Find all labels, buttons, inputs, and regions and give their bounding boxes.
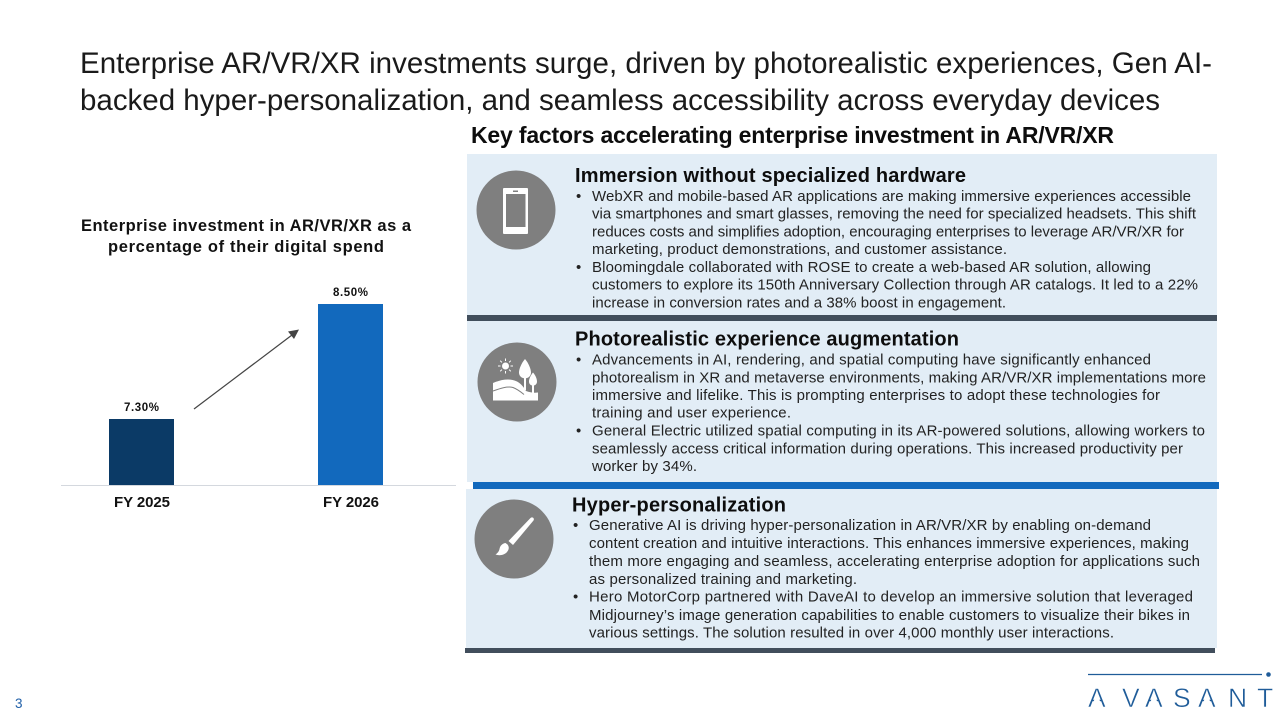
chart title (81, 217, 412, 256)
bar chart (61, 287, 456, 511)
text block: Midjourney’s image generation capabilities to enable customers to visualize their bikes in (589, 607, 1190, 624)
text block: • (573, 517, 578, 534)
text block: immersive and lifelike. This is prompting enterprises to adopt these technologies for (592, 387, 1160, 404)
heading: key factors: Key factors accelerating enterprise investment in AR/VR/XR (471, 122, 1114, 148)
text block (576, 352, 1206, 475)
text block: • (576, 188, 581, 205)
text block: increase in conversion rates and a 38% boost in engagement. (592, 295, 1006, 312)
text block: via smartphones and smart glasses, removing the need for specialized headsets. This shift (592, 206, 1197, 223)
text block: • (576, 423, 581, 440)
text block: photorealism in XR and metaverse environments, making AR/VR/XR implementations more (592, 369, 1206, 386)
panel: photorealistic experience augmentation (467, 321, 1219, 489)
text block: marketing, product demonstrations, and customer assistance. (592, 241, 1007, 258)
title: backed hyper-personalization, and seamless accessibility across everyday devices (80, 84, 1160, 117)
text block: General Electric utilized spatial computing in its AR-powered solutions, allowing workers to (592, 423, 1205, 440)
icon: paintbrush (474, 500, 554, 578)
bar: FY 2025 (109, 402, 174, 511)
heading: Immersion without specialized hardware (575, 165, 966, 187)
text block: WebXR and mobile-based AR applications are making immersive experiences accessible (592, 188, 1191, 205)
panel: hyper-personalization (465, 489, 1217, 653)
heading: Photorealistic experience augmentation (575, 329, 959, 351)
text block: • (573, 589, 578, 606)
text block: training and user experience. (592, 405, 791, 422)
title: Enterprise AR/VR/XR investments surge, driven by photorealistic experiences, Gen AI- (80, 47, 1212, 80)
icon: smartphone (476, 170, 556, 250)
arrow: growth (194, 330, 299, 409)
text block: Bloomingdale collaborated with ROSE to create a web-based AR solution, allowing (592, 259, 1151, 276)
bar: FY 2026: 8.50% (333, 287, 368, 299)
bar: FY 2026 (318, 287, 383, 511)
chart title: percentage of their digital spend (108, 238, 384, 256)
icon: landscape (478, 342, 556, 422)
text block: Advancements in AI, rendering, and spatial computing have significantly enhanced (592, 352, 1151, 368)
text block: various settings. The solution resulted in over 4,000 monthly user interactions. (589, 625, 1114, 642)
title (80, 47, 1212, 117)
text block: Hero MotorCorp partnered with DaveAI to develop an immersive solution that leveraged (589, 589, 1193, 606)
bar: FY 2026: FY 2026 (323, 494, 379, 511)
bar: FY 2025: 7.30% (124, 402, 159, 414)
text block: reduces costs and simplifies adoption, encouraging enterprises to leverage AR/VR/XR for (592, 223, 1184, 240)
panel: immersion without specialized hardware (467, 154, 1217, 321)
text block: Generative AI is driving hyper-personalization in AR/VR/XR by enabling on-demand (589, 517, 1151, 534)
heading: Hyper-personalization (572, 495, 786, 517)
text block (573, 517, 1200, 642)
text block: worker by 34%. (591, 458, 697, 475)
text block: them more engaging and seamless, accelerating enterprise adoption for applications such (589, 553, 1200, 570)
text block: • (576, 352, 581, 368)
bar: FY 2025: FY 2025 (114, 494, 170, 511)
text block: seamlessly access critical information during operations. This increased productivity per (592, 440, 1183, 457)
text block: content creation and intuitive interactions. This enhances immersive experiences, making (589, 535, 1189, 552)
text block: as personalized training and marketing. (589, 571, 857, 588)
page number: 3 (15, 696, 23, 711)
text block (576, 188, 1198, 312)
chart title: Enterprise investment in AR/VR/XR as a (81, 217, 412, 235)
logo: Avasant: AVASANT (1088, 683, 1273, 713)
text block: customers to explore its 150th Anniversary Collection through AR catalogs. It led to a 22% (592, 277, 1198, 294)
text block: • (576, 259, 581, 276)
